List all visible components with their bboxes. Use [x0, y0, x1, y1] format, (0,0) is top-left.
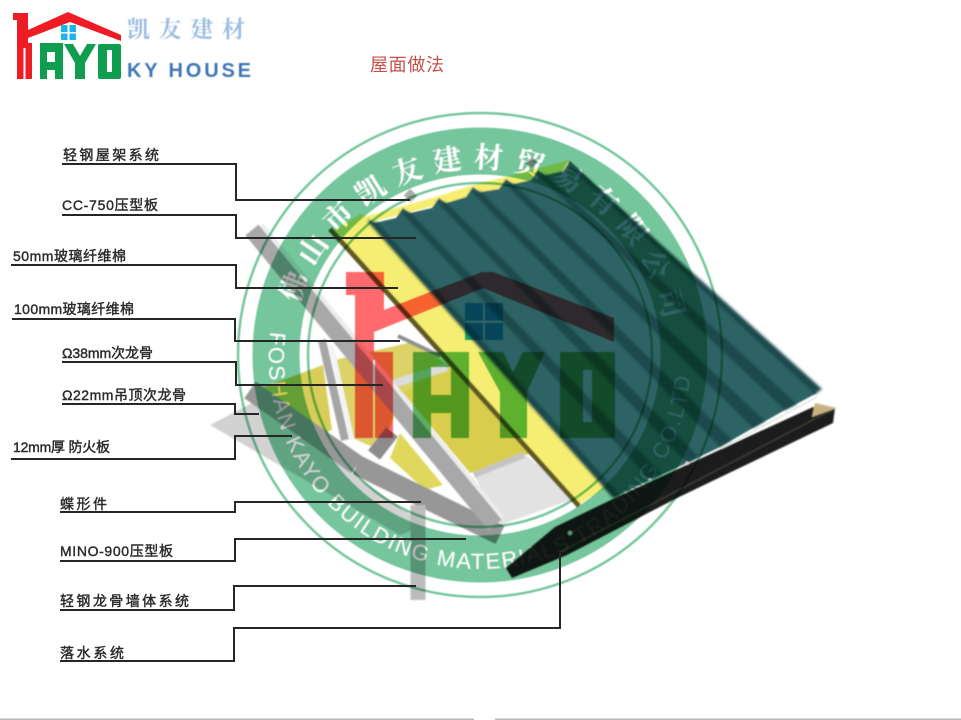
callout: 轻钢屋架系统	[62, 147, 410, 200]
black eaves gutter	[506, 397, 837, 578]
floor shadow plane	[210, 403, 425, 535]
callout: MINO-900压型板: MINO-900压型板	[60, 543, 173, 559]
callout: 12mm厚防火板	[11, 436, 292, 459]
callout: 12mm厚防火板: 12mm厚 防火板	[13, 439, 110, 455]
callout: 轻钢屋架系统: 轻钢屋架系统	[63, 147, 159, 163]
roof cross-section illustration	[210, 160, 837, 600]
insulation underside edge	[330, 229, 579, 506]
callout: 100mm玻璃纤维棉	[12, 301, 400, 341]
callout: CC-750压型板: CC-750压型板	[62, 197, 158, 213]
suspended ceiling board	[473, 453, 579, 525]
roof sheet ribs	[367, 164, 822, 498]
callout: 100mm玻璃纤维棉: 100mm玻璃纤维棉	[14, 301, 134, 317]
steel truss members	[250, 160, 535, 600]
callout: 轻钢龙骨墙体系统	[60, 586, 416, 610]
callout: 落水系统	[60, 553, 560, 661]
logo: KAYO house mark	[13, 12, 121, 79]
stamp Chinese company name: 佛山市凯友建材贸易有限公司	[276, 142, 687, 317]
callout: Ω38mm次龙骨	[62, 345, 383, 385]
yellow glass-wool insulation	[332, 160, 607, 505]
watermark large KAYO logo	[346, 272, 615, 438]
callout: 蝶形件: 蝶形件	[60, 496, 107, 512]
watermark stamp	[236, 111, 724, 599]
callout: 蝶形件	[60, 496, 421, 512]
stamp English company name: FOSHAN KAYO BUILDING MATERIALS TRADING CO.LTD	[268, 332, 690, 570]
callout: Ω38mm次龙骨: Ω38mm次龙骨	[62, 345, 153, 361]
callout: 50mm玻璃纤维棉: 50mm玻璃纤维棉	[13, 248, 126, 264]
green CC-750 profiled roof sheet	[367, 161, 822, 498]
bottom page edge	[0, 718, 961, 720]
callout: Ω22mm吊顶次龙骨: Ω22mm吊顶次龙骨	[62, 387, 186, 403]
lower insulation panels	[262, 342, 535, 490]
logo text: company name: 凯友建材	[127, 17, 245, 42]
callout: MINO-900压型板	[60, 539, 466, 561]
title: 屋面做法	[370, 55, 444, 75]
callout: CC-750压型板	[62, 197, 416, 238]
callout: 轻钢龙骨墙体系统: 轻钢龙骨墙体系统	[60, 593, 189, 609]
callout: 50mm玻璃纤维棉	[11, 248, 398, 288]
stamp rings and band	[238, 113, 722, 597]
callout: 落水系统: 落水系统	[60, 645, 124, 661]
callout: Ω22mm吊顶次龙骨	[62, 387, 259, 414]
logo text: KY HOUSE: KY HOUSE	[127, 60, 251, 82]
